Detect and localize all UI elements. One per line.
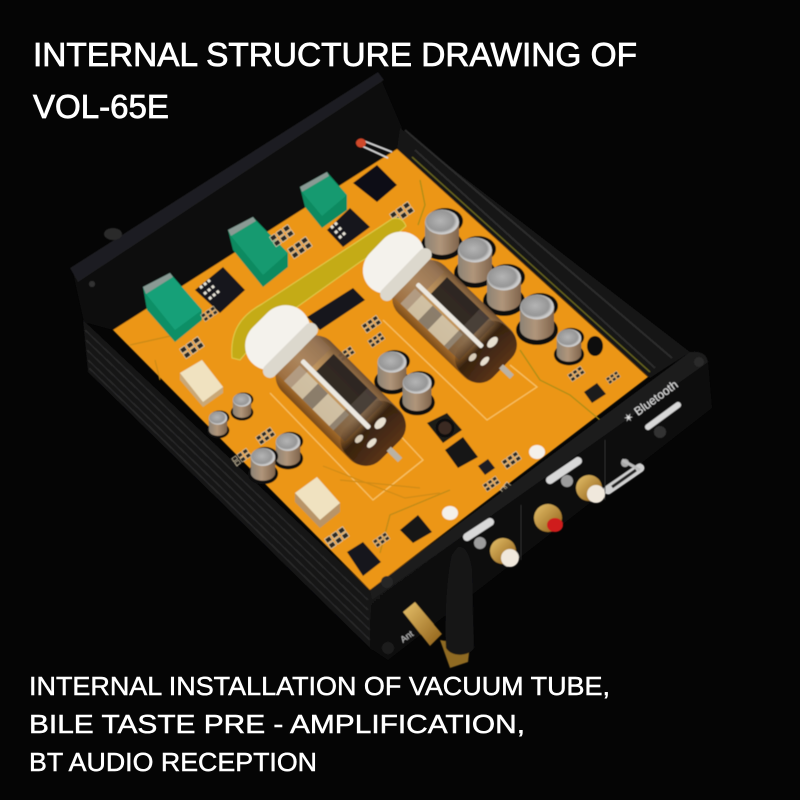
green terminal blocks xyxy=(143,172,347,342)
title: VOL-65E xyxy=(33,88,169,125)
rear wall rim xyxy=(70,72,384,282)
panel label: Ant: Ant xyxy=(398,628,416,645)
enclosure right wall xyxy=(397,128,690,378)
product: amplifier enclosure xyxy=(70,72,712,668)
title: INTERNAL STRUCTURE DRAWING OF xyxy=(33,36,637,73)
caption: INTERNAL INSTALLATION OF VACUUM TUBE, xyxy=(29,671,610,701)
integrated circuits xyxy=(195,165,606,576)
rear panel xyxy=(370,352,712,660)
panel thumb screws xyxy=(474,537,486,549)
electrolytic capacitors: centre xyxy=(374,350,435,415)
rear wall screw xyxy=(89,281,95,287)
gold SMA connector xyxy=(403,602,442,646)
relays xyxy=(180,360,340,528)
electrolytic capacitors: rear row xyxy=(421,208,584,365)
USB port xyxy=(608,459,640,490)
vacuum tube right xyxy=(353,222,536,401)
panel port labels xyxy=(467,522,490,537)
antenna xyxy=(403,547,474,668)
panel aux jack xyxy=(654,426,666,438)
side knob xyxy=(104,228,122,240)
circuit board xyxy=(113,149,648,590)
vacuum tube left xyxy=(235,295,425,485)
red indicator LED xyxy=(356,138,392,158)
caption: BILE TASTE PRE - AMPLIFICATION, xyxy=(29,709,525,739)
white LED domes xyxy=(442,445,545,520)
title xyxy=(33,36,637,125)
yellow tube bracket xyxy=(232,218,406,360)
SMD component clusters xyxy=(180,202,621,549)
enclosure rear wall xyxy=(72,72,402,330)
panel top edge xyxy=(370,352,708,600)
enclosure finned side wall xyxy=(83,320,372,650)
panel dividers xyxy=(521,440,605,560)
panel label: Bluetooth: ✶ Bluetooth xyxy=(621,377,681,426)
panel label pill xyxy=(648,405,678,427)
caption xyxy=(29,671,610,777)
circuit traces xyxy=(130,180,600,553)
panel screws xyxy=(381,576,393,588)
small capacitors: lower left xyxy=(207,392,303,484)
RCA jack left xyxy=(490,538,519,567)
RCA jack right xyxy=(576,475,605,503)
RCA jack red xyxy=(534,504,563,532)
caption: BT AUDIO RECEPTION xyxy=(29,747,317,777)
